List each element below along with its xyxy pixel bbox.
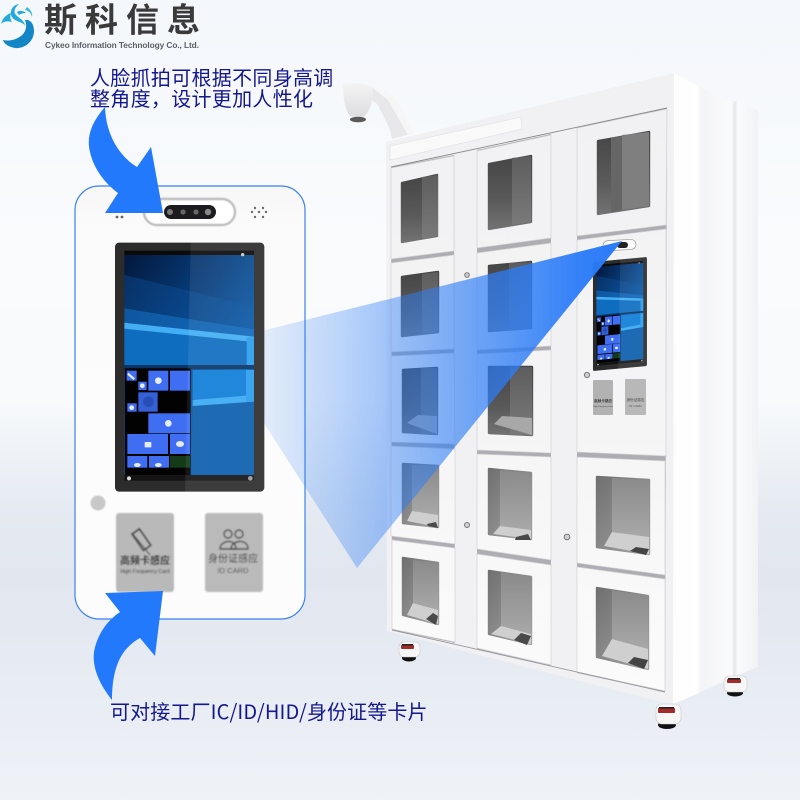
high frequency card reader: High Frequency Card bbox=[120, 569, 170, 575]
high frequency card reader bbox=[116, 513, 174, 592]
bottom seam bbox=[392, 630, 665, 692]
cabinet front bbox=[386, 73, 674, 705]
casters bbox=[399, 642, 747, 729]
recognition beam bbox=[257, 241, 622, 568]
people icon bbox=[220, 530, 248, 549]
logo wordmark: 斯科信息 bbox=[44, 2, 208, 38]
cabinet camera pill bbox=[603, 239, 636, 251]
camera pill bbox=[144, 199, 235, 225]
door windows bbox=[402, 132, 649, 669]
logo bbox=[1, 2, 208, 50]
high frequency card reader: 高频卡感应 bbox=[120, 554, 170, 567]
cabinet screen bbox=[593, 257, 647, 371]
high frequency reader small: High Frequency Card bbox=[593, 406, 613, 408]
enlarged terminal panel bbox=[75, 186, 305, 619]
window interiors bbox=[407, 132, 649, 669]
high frequency reader small: 高频卡感应 bbox=[594, 398, 612, 403]
id card reader small: 身份证感应 bbox=[627, 397, 645, 402]
arrow to camera bbox=[89, 107, 163, 213]
top caption: 整角度，设计更加人性化 bbox=[90, 83, 313, 112]
id card reader: 身份证感应 bbox=[208, 552, 258, 565]
bottom caption: 可对接工厂IC/ID/HID/身份证等卡片 bbox=[110, 696, 428, 725]
terminal speaker and sensor details bbox=[90, 199, 267, 510]
id card reader bbox=[205, 513, 263, 592]
id card reader small bbox=[625, 379, 646, 415]
terminal screen bbox=[115, 243, 264, 492]
ceiling camera arm bbox=[343, 83, 414, 139]
panel lock bbox=[90, 496, 106, 510]
logo english name: Cykeo Information Technology Co., Ltd. bbox=[45, 40, 199, 50]
arrow to card reader bbox=[94, 591, 163, 700]
id card reader: ID CARD bbox=[218, 566, 249, 575]
locker cabinet bbox=[343, 73, 758, 729]
caster right bbox=[724, 676, 747, 696]
left column doors bbox=[391, 156, 455, 642]
card icon bbox=[132, 529, 151, 555]
top display strip bbox=[390, 117, 522, 160]
speaker dots bbox=[251, 207, 267, 218]
caster front bbox=[656, 704, 681, 729]
door locks bbox=[464, 273, 590, 540]
high frequency reader small bbox=[593, 380, 613, 415]
id card reader small: ID CARD bbox=[629, 404, 642, 408]
sensor dots bbox=[116, 216, 123, 218]
top seam bbox=[391, 108, 667, 167]
door column backing bbox=[391, 108, 667, 692]
cabinet right side bbox=[671, 73, 758, 705]
right column doors bbox=[577, 109, 667, 691]
logo icon bbox=[1, 4, 34, 48]
middle column doors bbox=[477, 135, 551, 665]
cabinet card readers bbox=[593, 379, 646, 415]
top caption: 人脸抓拍可根据不同身高调 bbox=[90, 62, 334, 91]
caster left bbox=[399, 642, 420, 662]
